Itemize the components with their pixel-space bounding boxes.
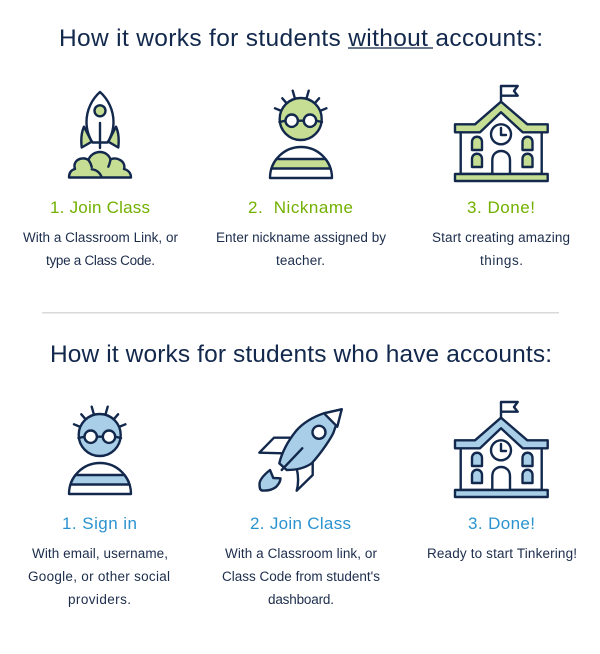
step text: sign in: providers. xyxy=(68,592,131,607)
icon: blue student xyxy=(69,407,131,494)
step text: join class: Class Code from student's xyxy=(222,569,380,584)
step text: join class xyxy=(23,230,178,268)
step heading: 3. Done: 3. Done! xyxy=(468,514,535,533)
step text: sign in xyxy=(28,546,170,607)
step text: join class: dashboard. xyxy=(268,592,334,607)
step text: done: Start creating amazing xyxy=(432,230,570,245)
step heading: 2. Join Class: 2. Join Class xyxy=(250,514,351,533)
title: students who have accounts: How it works for students who have accounts: xyxy=(50,341,552,368)
icon: blue rocket xyxy=(259,409,342,491)
step text: join class xyxy=(222,546,380,607)
step heading: 2. Nickname: 2. Nickname xyxy=(248,198,353,217)
step text: join class: With a Classroom Link, or xyxy=(23,230,178,245)
title: students without accounts: How it works for students without accounts: xyxy=(59,25,543,52)
step heading: 3. Done: 3. Done! xyxy=(467,198,535,217)
step text: join class: type a Class Code. xyxy=(46,253,155,268)
icon: green student xyxy=(270,91,332,178)
step text: nickname: Enter nickname assigned by xyxy=(216,230,386,245)
step text: done: things. xyxy=(480,253,523,268)
step heading: 1. Join Class: 1. Join Class xyxy=(50,198,150,217)
step text: sign in: Google, or other social xyxy=(28,569,170,584)
step text: join class: With a Classroom link, or xyxy=(225,546,378,561)
step text: nickname xyxy=(216,230,386,268)
step text: sign in: With email, username, xyxy=(32,546,168,561)
step text: ready: Ready to start Tinkering! xyxy=(427,546,577,561)
step heading: 1. Sign in: 1. Sign in xyxy=(62,514,137,533)
step text: nickname: teacher. xyxy=(276,253,325,268)
icon: green rocket with cloud xyxy=(69,92,131,178)
step text: done xyxy=(432,230,570,268)
icon: blue school xyxy=(455,402,548,497)
icon: green school xyxy=(455,86,548,181)
